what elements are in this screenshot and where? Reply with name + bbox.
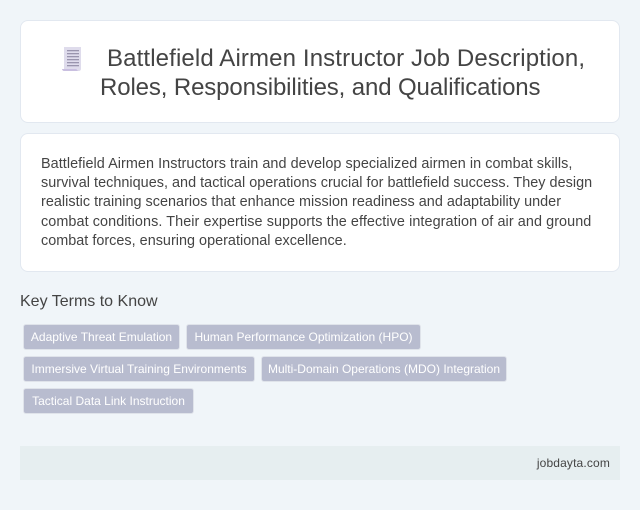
title xyxy=(100,45,585,101)
text block: description: survival techniques, and tactical operations crucial for battlefield success. They design xyxy=(41,175,592,191)
tag: Human Performance Optimization (HPO) xyxy=(194,330,413,344)
tag: Immersive Virtual Training Environments xyxy=(31,362,247,376)
text block: description: combat forces, ensuring operational excellence. xyxy=(41,233,347,249)
tag xyxy=(23,388,194,414)
tag xyxy=(23,356,255,382)
text block: description: combat conditions. Their expertise supports the effective integration of air and ground xyxy=(41,214,591,230)
tag xyxy=(23,324,180,350)
panel: title card xyxy=(20,20,620,123)
text block: description: realistic training scenarios that enhance mission readiness and adaptability under xyxy=(41,194,561,210)
title: Roles, Responsibilities, and Qualifications xyxy=(100,74,540,101)
heading: key terms: Key Terms to Know xyxy=(20,293,158,310)
tag list xyxy=(23,324,507,414)
footer bar xyxy=(20,446,620,480)
tag: Multi-Domain Operations (MDO) Integration xyxy=(268,362,500,376)
icon: document scroll xyxy=(62,47,81,71)
tag xyxy=(261,356,507,382)
footer text: jobdayta.com xyxy=(537,456,610,470)
panel: description xyxy=(20,133,620,272)
tag: Adaptive Threat Emulation xyxy=(31,330,172,344)
tag: Tactical Data Link Instruction xyxy=(32,394,185,408)
tag xyxy=(186,324,421,350)
text block: description: Battlefield Airmen Instructors train and develop specialized airmen in combat skills, xyxy=(41,156,572,172)
text block: description xyxy=(41,156,592,249)
title: Battlefield Airmen Instructor Job Description, xyxy=(107,45,585,72)
